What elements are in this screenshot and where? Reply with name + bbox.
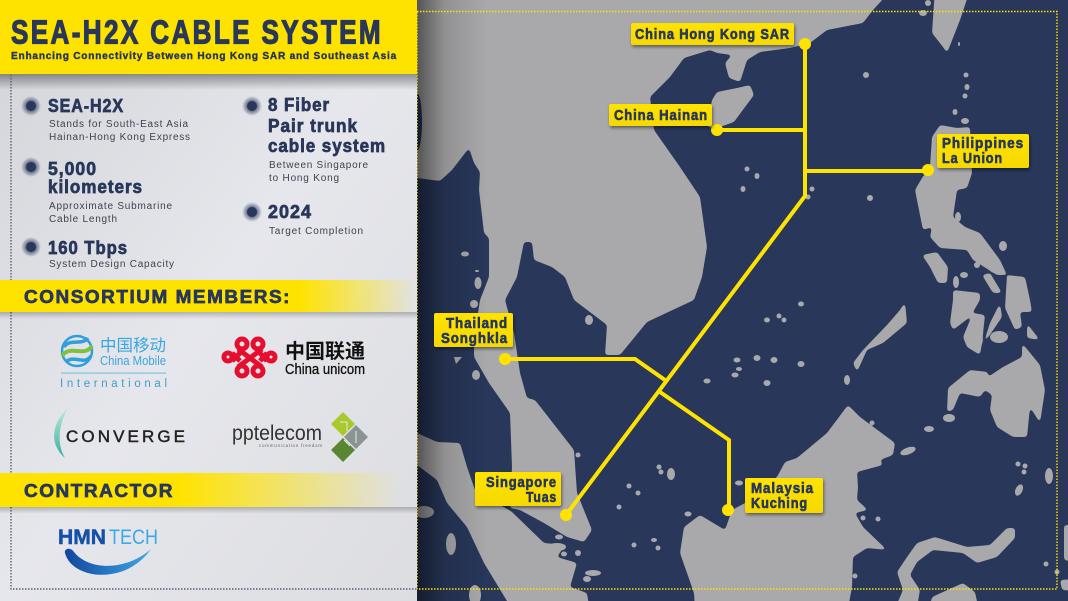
logo: Converge: CONVERGE (66, 427, 187, 446)
fact: 5,000 kilometers: kilometers (48, 177, 143, 197)
heading band: contractor: CONTRACTOR (24, 480, 174, 501)
label: Thailand Songhkla (434, 313, 513, 347)
fact: SEA-H2X (21, 96, 190, 143)
label: Philippines La Union (937, 134, 1029, 168)
map: sea background (417, 0, 1068, 601)
fact: SEA-H2X: Hainan-Hong Kong Express (49, 132, 190, 143)
fact: 8 Fiber Pair trunk cable system: Pair trunk (268, 116, 358, 136)
fact: 8 Fiber Pair trunk cable system (242, 95, 386, 184)
fact: 2024: 2024 (268, 202, 312, 222)
logo: HMN Tech: HMN (58, 526, 106, 549)
fact: 8 Fiber Pair trunk cable system: Between Singapore (269, 160, 368, 171)
fact: 8 Fiber Pair trunk cable system: 8 Fiber (268, 95, 330, 115)
label: China Hainan (609, 104, 712, 126)
fact: 5,000 kilometers (21, 157, 172, 225)
logo: China Mobile International: China Mobile (100, 353, 166, 368)
logo: pptelecom (232, 412, 368, 462)
logo: HMN Tech (58, 526, 158, 575)
logo: pptelecom: pptelecom (232, 422, 322, 445)
fact: 160 Tbps (21, 237, 174, 270)
fact: SEA-H2X: SEA-H2X (48, 96, 124, 116)
fact: 5,000 kilometers: Cable Length (49, 214, 117, 225)
label: Singapore Tuas: Tuas (526, 489, 557, 506)
label: Singapore Tuas: Singapore (486, 474, 557, 491)
label: Malaysia Kuching (745, 478, 823, 513)
logo: China Mobile International (60, 336, 167, 390)
map: land masses (395, 0, 1068, 601)
cable routes (505, 44, 928, 515)
label: Singapore Tuas (475, 472, 561, 506)
landing station dots (499, 38, 934, 521)
map: small islands (414, 0, 1060, 601)
fact: 5,000 kilometers: 5,000 (48, 159, 97, 179)
heading band: consortium members: CONSORTIUM MEMBERS: (24, 286, 291, 307)
logo: HMN Tech: TECH (109, 526, 158, 549)
logo: China Mobile International: International (60, 378, 167, 390)
label: China Hainan: China Hainan (614, 107, 708, 124)
subtitle: Enhancing Connectivity Between Hong Kong SAR and Southeast Asia (11, 50, 397, 62)
logo: Converge (54, 408, 187, 458)
label: Philippines La Union: La Union (942, 150, 1003, 167)
fact: 160 Tbps: 160 Tbps (48, 238, 128, 258)
fact: 2024: Target Completion (269, 226, 363, 237)
fact: 2024 (242, 202, 363, 237)
logo: China Unicom: China unicom (285, 362, 365, 378)
title: SEA-H2X CABLE SYSTEM (11, 14, 383, 50)
heading band: consortium members (0, 280, 417, 319)
logo: China Mobile International: 中国移动 (100, 336, 166, 355)
logo: pptelecom: communication freedom (259, 443, 322, 448)
heading band: contractor (0, 473, 417, 514)
fact: 8 Fiber Pair trunk cable system: cable system (268, 136, 386, 156)
label: Philippines La Union: Philippines (942, 135, 1024, 152)
fact: 5,000 kilometers: Approximate Submarine (49, 201, 172, 212)
label: Malaysia Kuching: Malaysia (751, 480, 814, 497)
label: China Hong Kong SAR (631, 23, 794, 45)
fact: SEA-H2X: Stands for South-East Asia (49, 119, 188, 130)
logo: China Unicom (224, 339, 365, 378)
label: Thailand Songhkla: Songhkla (441, 330, 508, 347)
fact: 160 Tbps: System Design Capacity (49, 259, 174, 270)
panel: left information panel (0, 0, 417, 601)
fact: 8 Fiber Pair trunk cable system: to Hong Kong (269, 173, 339, 184)
logo: China Unicom: 中国联通 (285, 340, 365, 363)
label: Malaysia Kuching: Kuching (751, 495, 808, 512)
header banner (0, 0, 417, 74)
label: Thailand Songhkla: Thailand (446, 315, 508, 332)
label: China Hong Kong SAR: China Hong Kong SAR (635, 26, 790, 43)
